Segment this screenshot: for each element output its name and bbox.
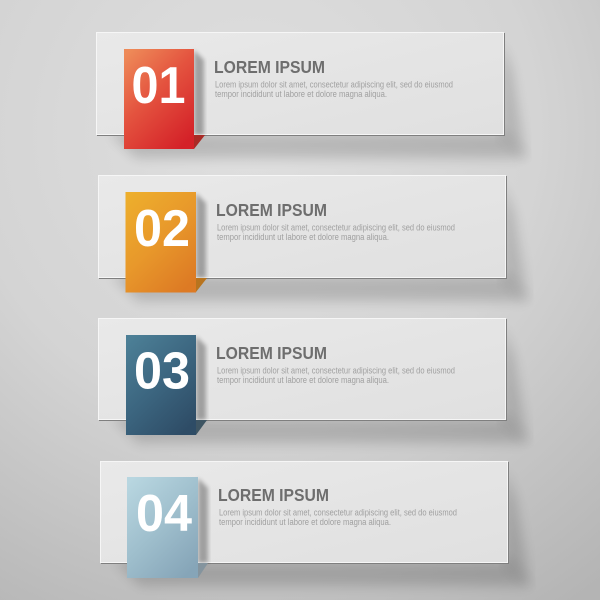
body text: Lorem ipsum dolor sit amet, consectetur adipiscing elit, sed do eiusmod — [219, 508, 457, 518]
panel: item 01 — [96, 32, 526, 158]
number: 03 — [134, 342, 190, 400]
tab shadow — [194, 50, 204, 135]
tab fold — [196, 420, 207, 435]
number tab — [124, 49, 194, 149]
panel shadow — [112, 275, 528, 301]
number tab — [126, 335, 196, 435]
panel card — [96, 32, 505, 136]
body text: tempor incididunt ut labore et dolore magna aliqua. — [219, 517, 391, 527]
body text: tempor incididunt ut labore et dolore magna aliqua. — [217, 375, 389, 385]
body text — [217, 222, 455, 242]
panel card — [100, 461, 509, 564]
panel card — [98, 175, 507, 279]
tab shadow — [196, 336, 206, 420]
tab fold — [196, 278, 207, 292]
number: 02 — [134, 200, 190, 258]
body text — [217, 366, 455, 385]
tab fold — [194, 135, 205, 149]
panel: item 04 — [100, 461, 530, 586]
body text — [219, 508, 457, 527]
number: 04 — [136, 485, 192, 543]
body text: tempor incididunt ut labore et dolore magna aliqua. — [217, 232, 389, 242]
number tab — [127, 477, 198, 578]
body text — [215, 80, 453, 99]
heading: LOREM IPSUM — [214, 57, 325, 77]
heading: LOREM IPSUM — [218, 485, 329, 505]
body text: Lorem ipsum dolor sit amet, consectetur adipiscing elit, sed do eiusmod — [217, 222, 455, 232]
body text: Lorem ipsum dolor sit amet, consectetur adipiscing elit, sed do eiusmod — [217, 366, 455, 376]
number tab — [126, 192, 196, 292]
tab shadow — [198, 478, 208, 563]
panel: item 03 — [98, 318, 528, 443]
panel shadow — [110, 132, 526, 158]
number: 01 — [132, 57, 186, 115]
body text: Lorem ipsum dolor sit amet, consectetur adipiscing elit, sed do eiusmod — [215, 80, 453, 90]
panel: item 02 — [98, 175, 528, 301]
panel shadow — [112, 417, 528, 443]
tab shadow — [196, 193, 206, 278]
tab fold — [198, 563, 208, 578]
panel shadow — [114, 560, 530, 586]
heading: LOREM IPSUM — [216, 343, 327, 363]
heading: LOREM IPSUM — [216, 200, 327, 220]
panel card — [98, 318, 507, 421]
body text: tempor incididunt ut labore et dolore magna aliqua. — [215, 89, 387, 99]
